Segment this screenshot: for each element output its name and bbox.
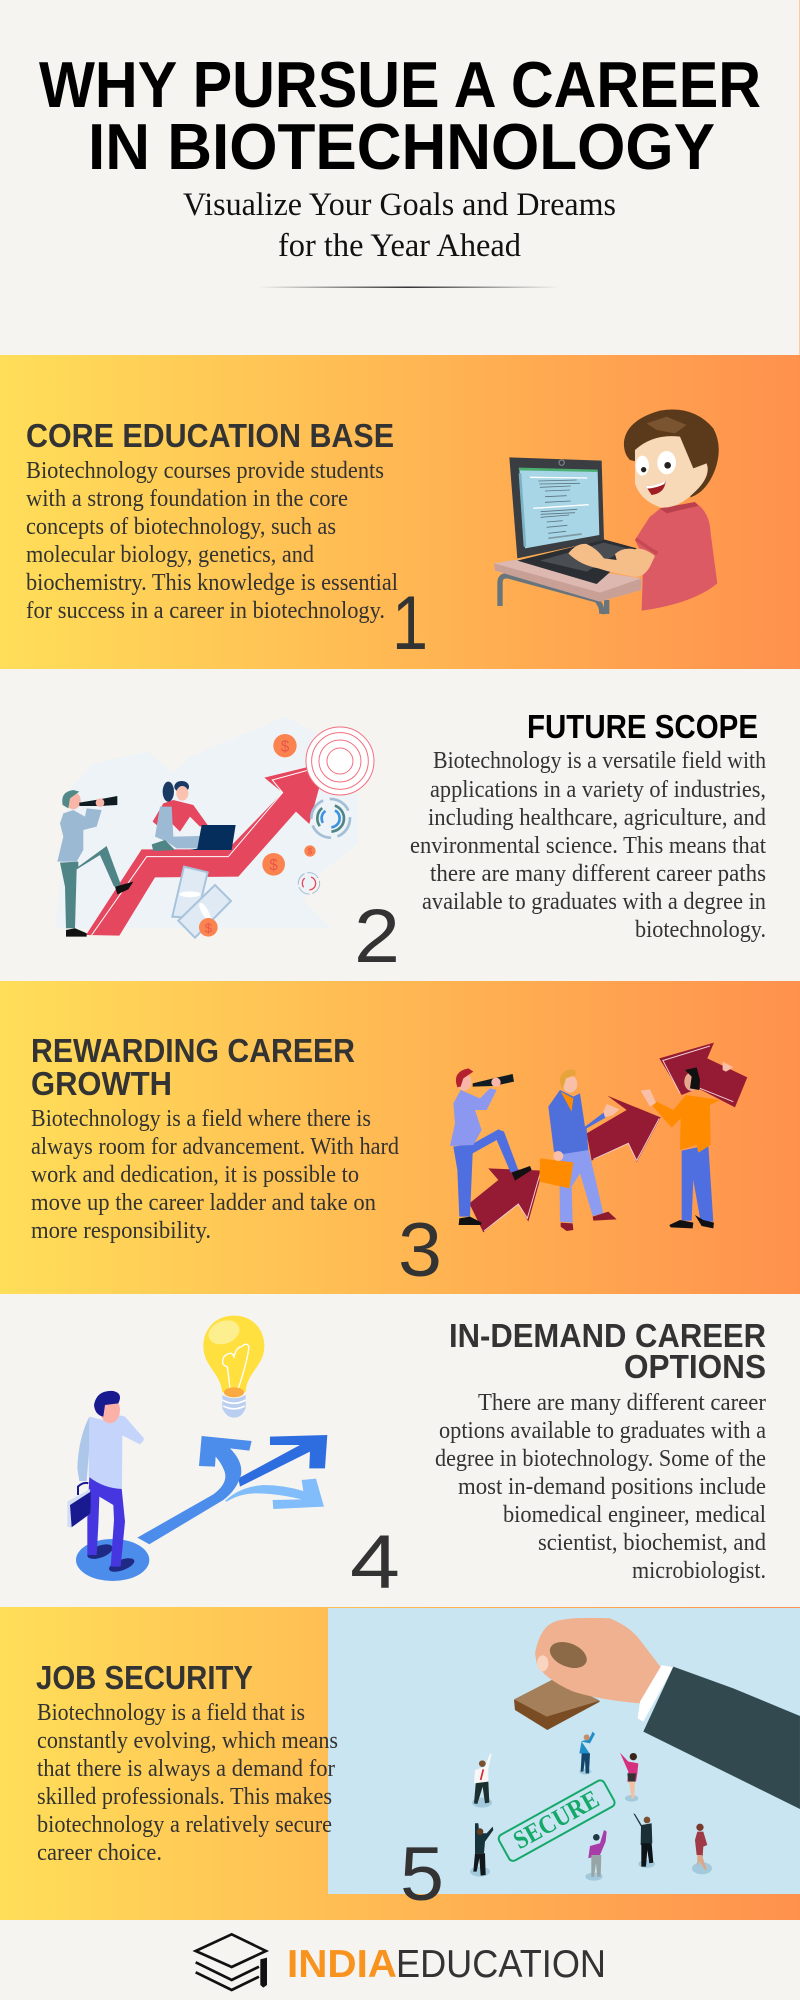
body text: in-demand career options: degree in biotechnology. Some of the (435, 1446, 766, 1472)
woman with laptop (152, 781, 236, 851)
body text: future scope (410, 748, 766, 943)
heading: in-demand career options (449, 1317, 766, 1385)
body text: core education base: for success in a career in biotechnology. (26, 598, 385, 624)
body text: in-demand career options: There are many different career (478, 1390, 766, 1416)
body text: future scope: available to graduates with a degree in (422, 889, 766, 915)
man with telescope (450, 1068, 532, 1225)
thinking man (67, 1391, 144, 1575)
stamp mark: secure: SECURE (508, 1784, 604, 1855)
body text: rewarding career growth: more responsibility. (31, 1218, 211, 1244)
logo: India Education (196, 1934, 606, 1990)
body text: in-demand career options: scientist, biochemist, and (538, 1530, 766, 1556)
body text: core education base: molecular biology, genetics, and (26, 542, 314, 568)
body text: job security: constantly evolving, which means (37, 1728, 338, 1754)
body text: in-demand career options: options available to graduates with a (439, 1418, 766, 1444)
body text: future scope: Biotechnology is a versatile field with (433, 748, 766, 774)
small crowd (470, 1732, 712, 1881)
body text: future scope: biotechnology. (635, 917, 766, 943)
heading: in-demand career options: OPTIONS (624, 1348, 766, 1385)
body text: future scope: applications in a variety of industries, (430, 777, 766, 803)
man with telescope (57, 790, 133, 937)
number 5: 5 (400, 1832, 444, 1917)
body text: job security: Biotechnology is a field that is (37, 1700, 305, 1726)
body text: future scope: environmental science. This means that (410, 833, 766, 859)
subtitle: Visualize Your Goals and Dreams (183, 187, 616, 223)
man with briefcase (539, 1069, 619, 1231)
title (39, 48, 761, 183)
body text: core education base (26, 458, 398, 624)
number 3: 3 (398, 1208, 442, 1293)
hand (535, 1618, 662, 1703)
body text: in-demand career options: biomedical engineer, medical (503, 1502, 766, 1528)
illustration: career arrow: $ (205, 921, 213, 936)
body text: core education base: concepts of biotechnology, such as (26, 514, 336, 540)
subtitle: for the Year Ahead (278, 228, 521, 264)
body text: in-demand career options: microbiologist. (632, 1558, 766, 1584)
heading: in-demand career options: IN-DEMAND CAREER (449, 1317, 766, 1354)
body text: rewarding career growth: move up the career ladder and take on (31, 1190, 376, 1216)
title: IN BIOTECHNOLOGY (88, 110, 715, 183)
panel: in-demand career options (67, 1316, 766, 1605)
body text: job security: that there is always a demand for (37, 1756, 335, 1782)
body text: job security: biotechnology a relatively secure (37, 1812, 332, 1838)
heading: job security: JOB SECURITY (36, 1659, 253, 1696)
logo: India Education: INDIA (287, 1943, 397, 1986)
logo: India Education: EDUCATION (396, 1943, 606, 1986)
body text: rewarding career growth: always room for advancement. With hard (31, 1134, 399, 1160)
panel: rewarding career growth (0, 981, 800, 1294)
body text: in-demand career options (435, 1390, 766, 1584)
body text: core education base: with a strong foundation in the core (26, 486, 348, 512)
panel: job security (0, 1607, 800, 1920)
heading: core education base: CORE EDUCATION BASE (26, 417, 394, 454)
light bulb (203, 1316, 264, 1418)
body text: job security (37, 1700, 338, 1866)
heading: rewarding career growth: GROWTH (31, 1065, 172, 1102)
stamp (514, 1678, 600, 1730)
heading: rewarding career growth (31, 1032, 355, 1102)
man from behind (641, 1062, 733, 1228)
illustration: three professionals and arrows (450, 1043, 747, 1232)
icon: stacked books with bookmark (196, 1934, 267, 1990)
panel: core education base (0, 355, 800, 669)
body text: future scope: including healthcare, agriculture, and (428, 805, 766, 831)
suit sleeve (643, 1667, 800, 1809)
illustration: boy at laptop (494, 410, 719, 614)
illustration: career arrow: $ (269, 857, 278, 874)
body text: rewarding career growth: work and dedication, it is possible to (31, 1162, 359, 1188)
subtitle (183, 187, 616, 264)
number 1: 1 (392, 581, 428, 666)
body text: core education base: Biotechnology courses provide students (26, 458, 384, 484)
body text: rewarding career growth: Biotechnology is a field where there is (31, 1106, 371, 1132)
body text: core education base: biochemistry. This knowledge is essential (26, 570, 398, 596)
heading: rewarding career growth: REWARDING CAREER (31, 1032, 355, 1069)
body text: in-demand career options: most in-demand positions include (458, 1474, 766, 1500)
body text: rewarding career growth (31, 1106, 399, 1244)
number 2: 2 (354, 894, 400, 979)
illustration: career arrow: $ (308, 847, 313, 856)
illustration: career arrow (55, 717, 374, 938)
number 4: 4 (350, 1520, 400, 1605)
panel: future scope (55, 708, 766, 979)
illustration: career arrow: $ (281, 738, 290, 755)
body text: future scope: there are many different career paths (430, 861, 766, 887)
body text: job security: skilled professionals. This makes (37, 1784, 332, 1810)
body text: job security: career choice. (37, 1840, 162, 1866)
heading: future scope: FUTURE SCOPE (527, 708, 758, 745)
illustration: person at crossroads with light bulb (67, 1316, 327, 1581)
illustration: hand stamping secure (470, 1618, 800, 1881)
